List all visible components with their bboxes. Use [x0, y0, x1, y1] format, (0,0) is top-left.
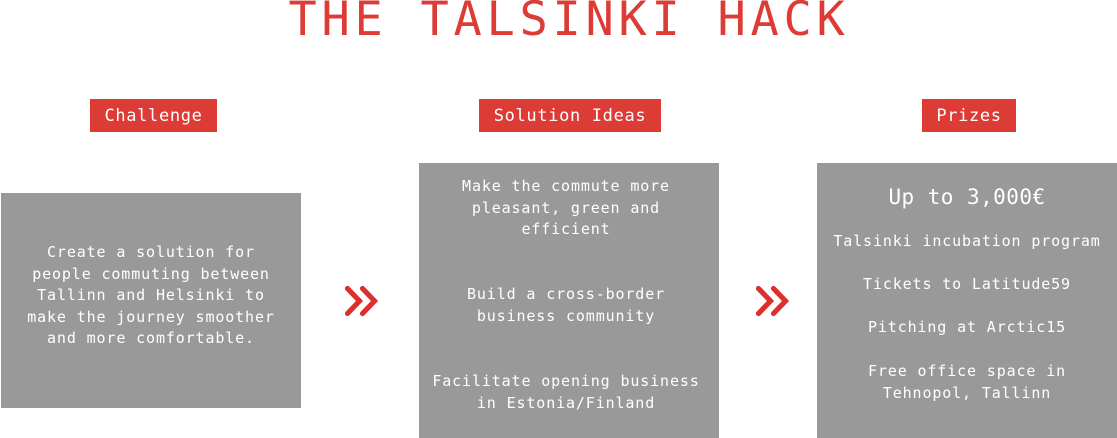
text: idea one — [462, 177, 670, 238]
text: challenge description: people commuting between — [32, 264, 270, 282]
heading: Prizes: Prizes — [936, 106, 1002, 126]
text: idea two — [467, 285, 665, 324]
text: challenge description: Tallinn and Helsinki to — [37, 286, 265, 304]
text: idea one: pleasant, green and — [472, 198, 660, 216]
icon: arrow two — [756, 286, 789, 316]
text: office space: Tehnopol, Tallinn — [883, 384, 1051, 402]
text: challenge description: and more comfortable. — [47, 329, 255, 347]
text: idea two: Build a cross-border — [467, 285, 665, 303]
panel: challenge — [1, 193, 301, 408]
text: challenge description: make the journey smoother — [27, 308, 275, 326]
heading: Solution Ideas — [479, 99, 661, 132]
text: idea one: efficient — [521, 220, 611, 238]
text: idea one: Make the commute more — [462, 177, 670, 195]
text: idea three: Facilitate opening business — [432, 372, 700, 390]
heading: Solution Ideas: Solution Ideas — [494, 106, 646, 126]
text: tickets: Tickets to Latitude59 — [863, 275, 1071, 293]
panel: prizes — [817, 163, 1117, 438]
text: pitching: Pitching at Arctic15 — [868, 318, 1066, 336]
heading: Prizes — [922, 99, 1016, 132]
heading: Challenge: Challenge — [104, 106, 203, 126]
text: challenge description — [27, 243, 275, 347]
panel: solution ideas — [419, 163, 719, 438]
text: idea two: business community — [477, 306, 655, 324]
text: office space — [868, 362, 1066, 402]
heading: Challenge — [90, 99, 217, 132]
text: challenge description: Create a solution for — [47, 243, 255, 261]
text: idea three — [432, 372, 700, 412]
text: idea three: in Estonia/Finland — [477, 394, 655, 412]
icon: arrow one — [344, 286, 378, 316]
text: top prize: Up to 3,000€ — [888, 185, 1046, 209]
text: incubation: Talsinki incubation program — [833, 232, 1101, 250]
text: office space: Free office space in — [868, 362, 1066, 380]
